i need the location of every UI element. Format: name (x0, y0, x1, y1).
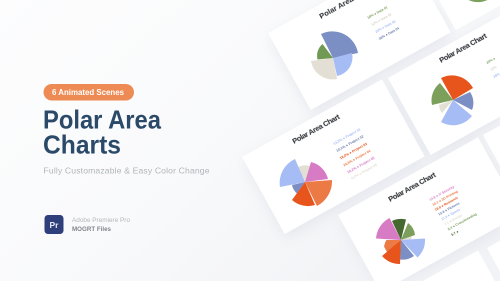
badge: 6 animated scenes: 6 Animated Scenes (52, 88, 125, 97)
legend: left card: 8,0% ● Project 06 (351, 163, 378, 180)
card: bottom chart (338, 137, 500, 281)
title: Polar Area (43, 104, 161, 134)
legend: bottom card: 11.5 ● Sports (441, 208, 461, 221)
legend: left card (333, 127, 378, 180)
legend: bottom card: 13.8 ● Pictures (438, 201, 460, 216)
heading: left card: Polar Area Chart (291, 112, 342, 146)
polar chart: left card (280, 159, 332, 206)
legend: bottom card: 5.7 ● (451, 230, 459, 237)
badge: 6 animated scenes (44, 84, 134, 100)
legend: bottom card: 14.8 ● IT Security (429, 185, 455, 202)
legend: bottom card: 7.2 ● Design (444, 213, 463, 226)
heading: bottom card: Polar Area Chart (387, 170, 438, 204)
legend: bottom card (429, 185, 477, 237)
heading: right card: Polar Area Chart (438, 31, 489, 65)
legend: top card: 23% ● Data 03 (375, 19, 397, 34)
icon: Premiere Pro (44, 215, 64, 234)
title: Charts (43, 130, 121, 160)
background cards (423, 0, 500, 281)
legend: right card: 10% (490, 65, 497, 72)
text: file info: MOGRT Files (72, 227, 112, 233)
legend: left card: 10,1% ● Project 02 (336, 134, 364, 153)
legend: top card: 38% ● Data 04 (378, 26, 400, 41)
text: file info: Adobe Premiere Pro (72, 217, 130, 224)
polar chart: bottom card (376, 218, 425, 264)
legend: bottom card: 10.1 ● 3D Printing (432, 189, 459, 207)
legend: left card: 16,2% ● Project 05 (347, 156, 375, 174)
legend: top card: 12% ● Data 02 (371, 12, 393, 27)
polar chart: top card (311, 31, 358, 79)
card: top chart (268, 0, 451, 110)
subtitle: Fully Customazable & Easy Color Change (44, 166, 210, 176)
legend: top card: 18% ● Data 01 (367, 5, 389, 20)
card shadows (244, 5, 500, 281)
legend: left card: 13,2% ● Project 01 (333, 127, 361, 146)
legend: right card (486, 57, 500, 79)
legend: left card: 24,5% ● Project 04 (343, 149, 371, 167)
polar chart: right card (432, 75, 473, 125)
legend: left card: 18,0% ● Project 03 (339, 142, 368, 160)
card: left chart (242, 79, 425, 234)
title (43, 104, 161, 160)
legend: bottom card: 5.4 ● Crossbreeding (447, 212, 477, 231)
legend: bottom card: 18.9 ● Research (434, 196, 459, 212)
icon: partial green chart on top-right card (468, 0, 488, 2)
text: file info (72, 217, 130, 233)
legend: top card (367, 5, 400, 41)
icon: Premiere Pro: Pr (50, 220, 59, 230)
card: right chart (388, 16, 500, 155)
legend: right card: 20% ● (486, 57, 496, 65)
